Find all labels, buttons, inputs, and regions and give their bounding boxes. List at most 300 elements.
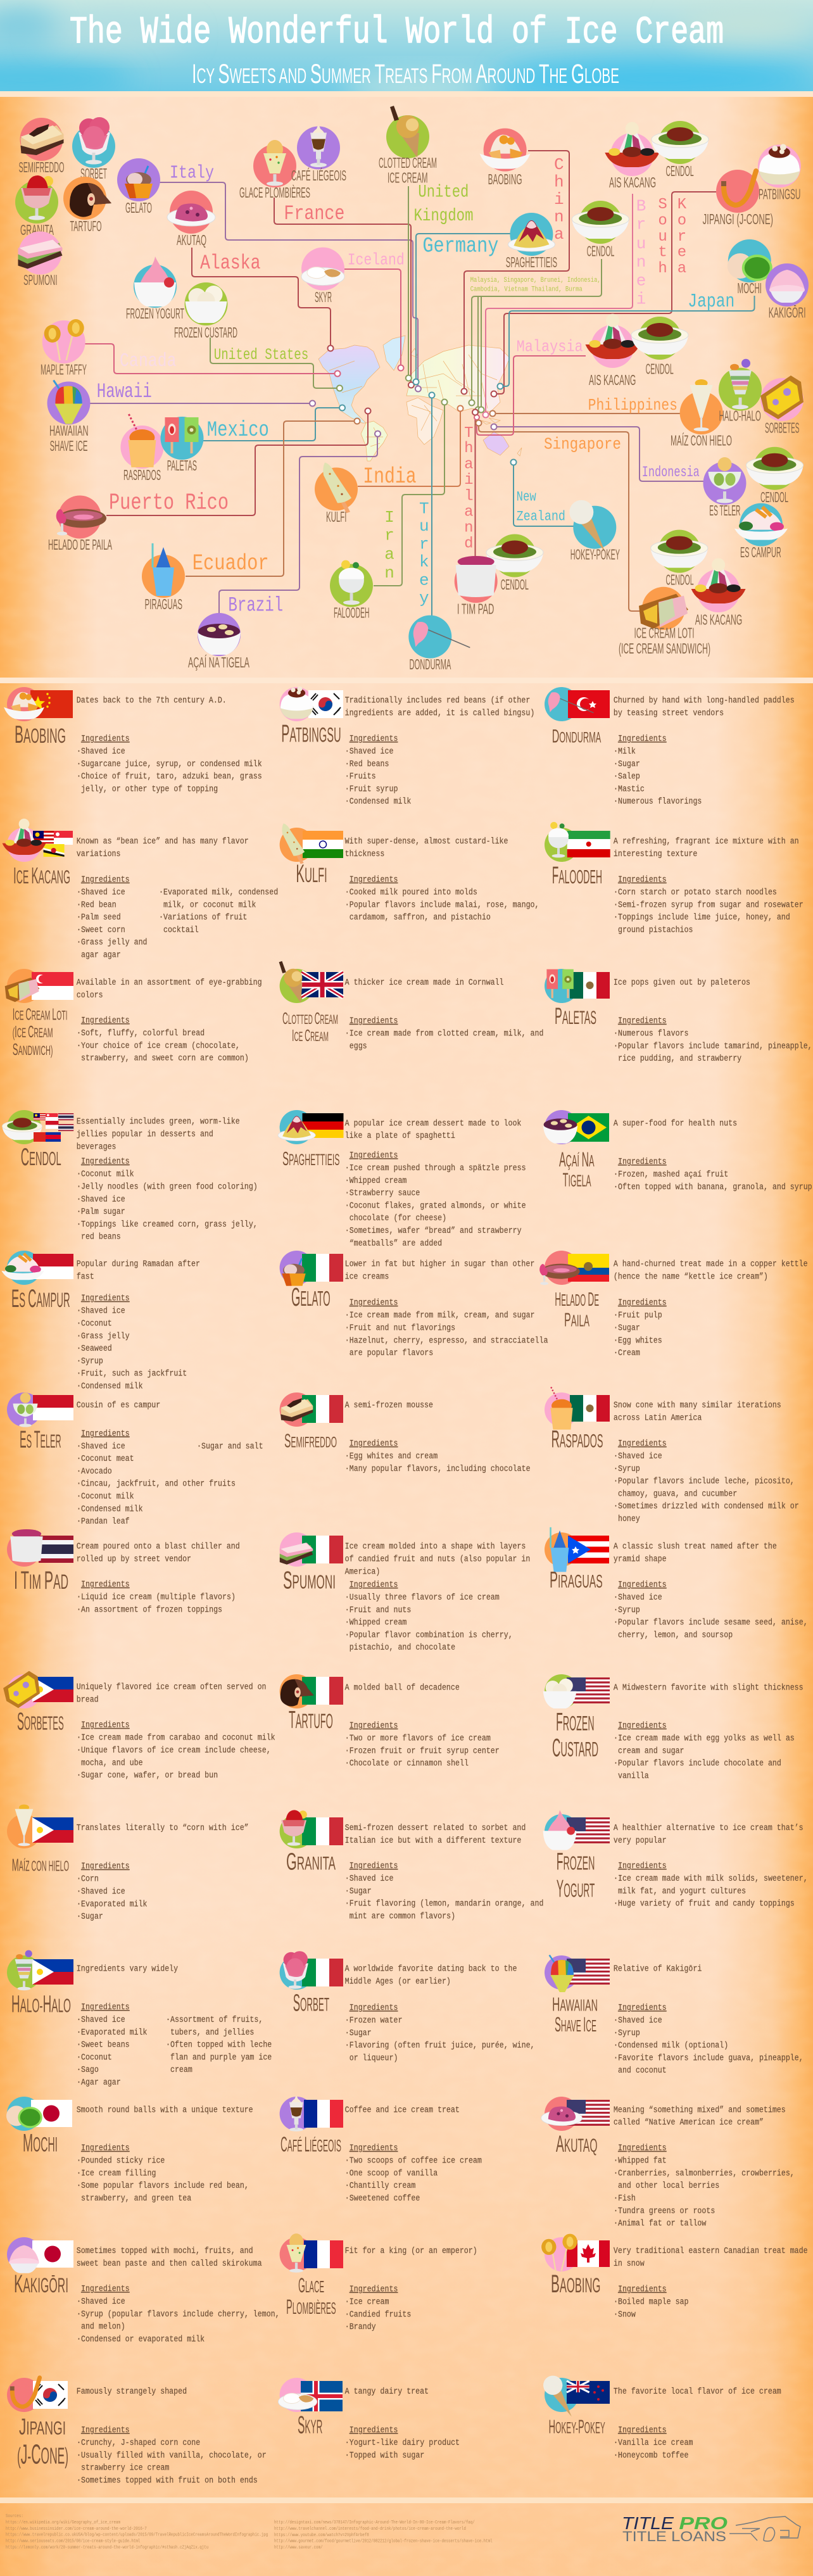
card: Sorbet: ·Frozen water — [345, 2015, 402, 2025]
map item: Granita: GRANITA — [20, 222, 54, 238]
card: Frozen Yogurt — [543, 1810, 808, 1909]
card: Helado de Paila: ·Egg whites — [614, 1335, 662, 1346]
card: Akutaq: and other local berries — [618, 2180, 719, 2191]
card: Sorbetes: bread — [77, 1694, 99, 1705]
map item: Es Teler: ES TELER — [709, 502, 740, 519]
card: Sorbet: Middle Ages (or earlier) — [345, 1976, 451, 1986]
card: Spumoni — [280, 1532, 530, 1653]
card: Paletas — [545, 969, 812, 1064]
card: Ice Cream Loti: ·Your choice of ice cream (chocolate, — [77, 1040, 240, 1051]
card: Patbingsu: ·Red beans — [345, 759, 389, 769]
card: Halo-Halo: flan and purple yam ice — [170, 2052, 272, 2062]
map item: Halo-Halo: HALO-HALO — [719, 408, 761, 424]
card: Raspados: ·Shaved ice — [614, 1451, 662, 1461]
card: I Tim Pad: Ingredients — [81, 1579, 130, 1589]
card: Hawaiian Shave Ice: SHAVE ICE — [555, 2013, 596, 2036]
card: Frozen Custard: ·Ice cream made with egg yolks as well as — [614, 1733, 795, 1743]
card: Semifreddo: ·Egg whites and cream — [345, 1451, 438, 1461]
country labels: Thailand — [464, 425, 474, 553]
card: Es Campur: Ingredients — [81, 1293, 130, 1303]
country labels: Singapore — [544, 435, 621, 454]
card: Semifreddo: ·Many popular flavors, including chocolate — [345, 1463, 531, 1474]
card: Hokey-Pokey: Ingredients — [618, 2425, 667, 2435]
map item: Dondurma — [408, 616, 470, 672]
card: I Tim Pad: Cream poured onto a blast chiller and — [77, 1541, 240, 1551]
card: Helado de Paila: HELADO DE — [555, 1288, 599, 1310]
card: Spaghettieis: like a plate of spaghetti — [345, 1130, 455, 1140]
card: Jipangi: ·Sometimes topped with fruit on both ends — [77, 2475, 258, 2485]
map item: Hokey-Pokey — [569, 500, 620, 563]
card: Hawaiian Shave Ice: ·Favorite flavors include guava, pineapple, — [614, 2052, 804, 2063]
card: Halo-Halo: ·Often topped with leche — [166, 2040, 272, 2050]
card: Es Teler: ·Coconut meat — [77, 1453, 134, 1463]
map item: Es Campur — [734, 503, 788, 560]
card: Maiz con Hielo: ·Evaporated milk — [77, 1898, 148, 1909]
card: Skyr: A tangy dairy treat — [345, 2386, 429, 2396]
card: Acai na Tigela: AÇAÍ NA — [559, 1148, 595, 1171]
country labels: Ecuador — [192, 551, 269, 576]
map item: Cendol (Brunei) — [652, 121, 709, 179]
card: Faloodeh: ground pistachios — [618, 925, 693, 935]
card: Frozen Custard: A Midwestern favorite with slight thickness — [614, 1683, 804, 1693]
card: Baobing: ·Shaved ice — [77, 746, 125, 756]
card: Baobing (maple taffy): Very traditional eastern Canadian treat made — [614, 2245, 808, 2256]
card: Frozen Custard: cream and sugar — [618, 1745, 684, 1756]
map item: Hawaiian Shave Ice: SHAVE ICE — [50, 438, 87, 454]
card: Hokey-Pokey: HOKEY-POKEY — [548, 2415, 605, 2438]
card: Clotted Cream Ice Cream: ICE CREAM — [292, 1026, 329, 1045]
card: Spumoni: SPUMONI — [283, 1567, 336, 1594]
map item: Cendol (Southeast Asia) — [572, 201, 629, 260]
card: Ice Cream Loti: ICE CREAM LOTI — [13, 1004, 68, 1023]
card: Patbingsu: Ingredients — [350, 733, 398, 743]
card: Es Campur: Popular during Ramadan after — [77, 1259, 200, 1269]
map item: Baobing — [480, 129, 531, 187]
country labels: New — [517, 489, 536, 505]
country labels: Mexico — [207, 419, 269, 443]
card: Raspados: honey — [618, 1513, 640, 1524]
card: Cendol: ·Shaved ice — [77, 1194, 125, 1204]
card: Frozen Yogurt: A healthier alternative to ice cream that’s — [614, 1822, 804, 1833]
card: Mochi: MOCHI — [23, 2130, 58, 2157]
map item: Ice Cream Loti — [619, 587, 710, 657]
card: Baobing: ·Choice of fruit, taro, adzuki bean, grass — [77, 771, 262, 781]
card: Cendol: ·Jelly noodles (with green food coloring) — [77, 1182, 258, 1192]
card: Spaghettieis: Ingredients — [350, 1150, 398, 1160]
card: Gelato: GELATO — [291, 1282, 331, 1311]
card: Spumoni: pistachio, and chocolate — [350, 1642, 455, 1653]
card: Es Campur: ·Seaweed — [77, 1343, 112, 1353]
map item: Mochi: MOCHI — [737, 280, 762, 296]
card: Ice Kacang: milk, or coconut milk — [163, 899, 256, 910]
country labels: Puerto Rico — [109, 489, 229, 515]
card: Sorbetes: Uniquely flavored ice cream often served on — [77, 1682, 267, 1692]
map item: Skyr: SKYR — [315, 289, 332, 305]
text: MAPLE TAFFY — [41, 362, 87, 378]
card: Acai na Tigela — [543, 1110, 812, 1192]
card: Spumoni: ·Whipped cream — [345, 1617, 407, 1627]
card: Semifreddo: Ingredients — [350, 1438, 398, 1448]
map item: Cendol (Singapore) — [651, 530, 708, 588]
card: Frozen Yogurt: ·Ice cream made with milk solids, sweetener, — [614, 1873, 808, 1883]
card: Clotted Cream Ice Cream: eggs — [350, 1040, 367, 1051]
card: Clotted Cream Ice Cream: CLOTTED CREAM — [282, 1009, 338, 1028]
card: Cafe Liegeois: ·Sweetened coffee — [345, 2193, 420, 2203]
card: Halo-Halo: tubers, and jellies — [170, 2027, 254, 2037]
card: Faloodeh: ·Corn starch or potato starch noodles — [614, 887, 777, 897]
card: Baobing (maple taffy): Ingredients — [618, 2284, 667, 2294]
card: Dondurma — [545, 687, 795, 807]
card: Maiz con Hielo: MAÍZ CON HIELO — [12, 1855, 69, 1874]
card: Sorbetes: mocha, and ube — [81, 1757, 143, 1768]
card: Spumoni: ·Fruit and nuts — [345, 1605, 411, 1615]
card: Acai na Tigela: A super-food for health nuts — [614, 1118, 737, 1128]
card: Glace Plombieres — [280, 2233, 477, 2332]
card: Glace Plombieres: PLOMBIÈRES — [286, 2295, 336, 2318]
card: Piraguas: cherry, lemon, and soursop — [618, 1629, 733, 1640]
card: Baobing: ·Sugarcane juice, syrup, or condensed milk — [77, 759, 262, 769]
card: Piraguas: ·Syrup — [614, 1605, 640, 1615]
card: Spaghettieis — [278, 1110, 526, 1248]
card: Helado de Paila: (hence the name “kettle ice cream”) — [614, 1271, 768, 1282]
map item: Sorbet — [72, 117, 115, 182]
card: Clotted Cream Ice Cream — [279, 961, 543, 1051]
card: Faloodeh: interesting texture — [614, 849, 697, 859]
card: Faloodeh: ·Semi-frozen syrup from sugar and rosewater — [614, 899, 804, 910]
card: Frozen Custard: CUSTARD — [552, 1734, 598, 1762]
map item: Cendol (Thailand) — [486, 534, 543, 593]
connector lines — [85, 151, 755, 616]
card: I Tim Pad — [7, 1529, 240, 1615]
card: Gelato: ·Hazelnut, cherry, espresso, and stracciatella — [345, 1335, 548, 1346]
card: Halo-Halo: ·Coconut — [77, 2052, 112, 2062]
card: Jipangi: (J-CONE) — [17, 2439, 68, 2470]
card: Paletas: PALETAS — [555, 1003, 596, 1029]
country labels: Philippines — [588, 396, 678, 415]
card: Hawaiian Shave Ice: Ingredients — [618, 2002, 667, 2012]
card: Frozen Yogurt: milk fat, and yogurt cultures — [618, 1886, 746, 1896]
card: Piraguas: Ingredients — [618, 1579, 667, 1589]
card: Mochi — [6, 2097, 253, 2203]
card: Kakigori: Sometimes topped with mochi, fruits, and — [77, 2245, 253, 2256]
card: Baobing (maple taffy): ·Snow — [614, 2309, 636, 2320]
card: Ice Cream Loti: Ingredients — [81, 1015, 130, 1025]
map item: Raspados: RASPADOS — [123, 467, 161, 483]
card: Tartufo: ·Chocolate or cinnamon shell — [345, 1758, 469, 1768]
card: Spaghettieis: ·Coconut flakes, grated almonds, or white — [345, 1200, 526, 1211]
card: Tartufo: A molded ball of decadence — [345, 1683, 460, 1693]
logo: Title Pro Title Loans: PRO — [679, 2513, 728, 2533]
country labels: Canada — [120, 350, 176, 372]
map item: Faloodeh — [330, 560, 373, 621]
card: Cafe Liegeois: ·One scoop of vanilla — [345, 2168, 438, 2178]
map item: Ais Kacang (Malaysia): AIS KACANG — [589, 372, 636, 388]
text: CAFÉ LIÉGEOIS — [291, 167, 346, 184]
card: Cendol: CENDOL — [21, 1144, 61, 1171]
map item: Cendol (Southeast Asia): CENDOL — [587, 243, 614, 260]
card: Spumoni: ·Usually three flavors of ice cream — [345, 1592, 500, 1602]
text: FROZEN YOGURT — [126, 305, 184, 322]
card: Ice Kacang: Ingredients — [81, 874, 130, 885]
card: Maiz con Hielo: Ingredients — [81, 1861, 130, 1871]
card: Es Teler: ES TELER — [20, 1427, 61, 1453]
country labels: Kingdom — [414, 206, 474, 226]
map item: Helado de Paila — [48, 495, 112, 553]
card: Piraguas: yramid shape — [614, 1554, 667, 1564]
card: Es Campur: ·Fruit, such as jackfruit — [77, 1368, 187, 1379]
card: Glace Plombieres: Ingredients — [350, 2284, 398, 2294]
country labels: Japan — [688, 291, 734, 313]
text: FALOODEH — [334, 605, 370, 621]
card: Ice Kacang: ·Variations of fruit — [159, 912, 247, 922]
map item: Raspados — [120, 414, 163, 483]
country labels: South — [658, 196, 667, 277]
card: Raspados: across Latin America — [614, 1412, 702, 1423]
country labels: France — [284, 202, 344, 225]
sources: left column: http://www.seriouseats.com/2015/08/ice-cream-style-guide.html — [6, 2539, 140, 2544]
card: Jipangi: ·Crunchy, J-shaped corn cone — [77, 2437, 200, 2447]
world map — [318, 336, 522, 461]
card: Halo-Halo: ·Evaporated milk — [77, 2027, 148, 2037]
card: Piraguas: A classic slush treat named after the — [614, 1541, 777, 1551]
country labels: China — [554, 155, 564, 244]
card: Glace Plombieres: Fit for a king (or an emperor) — [345, 2245, 477, 2256]
country labels: Iran — [384, 508, 394, 583]
card: Semifreddo — [280, 1392, 531, 1474]
card: Sorbetes: ·Sugar cone, wafer, or bread bun — [77, 1770, 218, 1780]
map item: Gelato — [117, 158, 160, 216]
card: Jipangi: Famously strangely shaped — [77, 2386, 187, 2396]
sources: left column: http://www.businessinsider.com/ice-cream-around-the-world-2016-7 — [6, 2526, 147, 2531]
card: Faloodeh — [545, 822, 804, 935]
card: Akutaq: Meaning “something mixed” and sometimes — [614, 2104, 786, 2115]
map item: Ais Kacang (Brunei) — [605, 122, 659, 191]
sources: right column: https://www.youtube.com/watch?v=2VphfArbef8 — [274, 2532, 369, 2537]
card: Dondurma: ·Sugar — [614, 759, 640, 769]
card: Ice Cream Loti: strawberry, and sweet corn are common) — [81, 1053, 249, 1063]
card: Baobing — [4, 687, 262, 794]
card: Frozen Custard: vanilla — [618, 1771, 649, 1781]
card: Kakigori: ·Shaved ice — [77, 2296, 125, 2306]
card: Raspados: Snow cone with many similar iterations — [614, 1400, 781, 1410]
card: Sorbetes: ·Unique flavors of ice cream include cheese, — [77, 1745, 271, 1755]
card: Sorbetes: SORBETES — [17, 1708, 64, 1735]
card: Sorbet: SORBET — [293, 1990, 329, 2016]
text: CLOTTED CREAM — [379, 155, 437, 171]
card: Granita: ·Sugar — [345, 1886, 372, 1896]
card: Gelato: Ingredients — [350, 1297, 398, 1308]
card: Mochi: ·Some popular flavors include red bean, — [77, 2180, 249, 2191]
card: Frozen Custard: Ingredients — [618, 1720, 667, 1731]
card: Baobing (maple taffy) — [541, 2234, 808, 2320]
card: Kulfi: cardamom, saffron, and pistachio — [350, 912, 491, 922]
card: Es Teler: ·Avocado — [77, 1466, 112, 1476]
country labels: Malaysia — [517, 337, 583, 356]
map item: Maiz con Hielo: MAÍZ CON HIELO — [671, 432, 732, 449]
card: Glace Plombieres: ·Brandy — [345, 2321, 376, 2332]
card: Sorbet — [280, 1951, 535, 2063]
map item: Cendol (Indonesia) — [746, 447, 803, 505]
card: Patbingsu — [280, 686, 534, 807]
card: Es Teler: Cousin of es campur — [77, 1400, 160, 1410]
card: Sorbetes: Ingredients — [81, 1720, 130, 1730]
map item: Patbingsu — [758, 144, 801, 202]
map item: Sorbetes — [760, 376, 804, 436]
map item: Jipangi — [703, 170, 773, 227]
card: Cendol — [3, 1110, 258, 1242]
card: Spumoni: of candied fruit and nuts (also popular in — [345, 1554, 530, 1564]
card: Baobing: Dates back to the 7th century A.D. — [77, 695, 227, 705]
card: Es Campur — [1, 1251, 200, 1391]
card: Ice Cream Loti — [5, 969, 262, 1063]
map item: Acai na Tigela: AÇAÍ NA TIGELA — [188, 654, 249, 671]
card: Ice Kacang: ·Grass jelly and — [77, 937, 148, 947]
country labels: United States — [214, 346, 308, 364]
card: Akutaq — [541, 2097, 795, 2228]
card: Halo-Halo: ·Shaved ice — [77, 2014, 125, 2024]
card: Spaghettieis: chocolate (for cheese) — [350, 1213, 446, 1223]
card: Cafe Liegeois: ·Chantilly cream — [345, 2180, 416, 2191]
card: Sorbet: A worldwide favorite dating back to the — [345, 1964, 517, 1974]
card: Jipangi: Ingredients — [81, 2425, 130, 2435]
card: Ice Kacang: ICE KACANG — [13, 862, 70, 888]
map item: Tartufo — [63, 177, 111, 234]
card: Ice Kacang: cocktail — [163, 925, 199, 935]
card: Spaghettieis: ·Strawberry sauce — [345, 1188, 420, 1198]
map item: Ice Cream Loti: (ICE CREAM SANDWICH) — [619, 640, 710, 657]
map item: Ais Kacang (Malaysia) — [585, 314, 640, 388]
card: Baobing (maple taffy): BAOBING — [551, 2270, 600, 2298]
card: Patbingsu: ·Fruit syrup — [345, 783, 398, 794]
card: Frozen Yogurt: Ingredients — [618, 1860, 667, 1871]
card: Gelato — [280, 1251, 548, 1358]
country labels: Korea — [678, 196, 687, 277]
country labels: India — [363, 464, 417, 489]
card: Kakigori: sweet bean paste and then called skirokuma — [77, 2258, 262, 2268]
card: Es Campur: ·Shaved ice — [77, 1306, 125, 1316]
map item: Maple Taffy — [41, 319, 87, 378]
country labels: Malaysia, Singapore, Brunei, Indonesia, — [470, 277, 601, 284]
country labels: United — [418, 183, 469, 203]
country labels: Alaska — [200, 251, 261, 275]
card: Mochi: Ingredients — [81, 2143, 130, 2153]
logo: Title Pro Title Loans: TITLE — [622, 2513, 674, 2533]
card: Ice Kacang: Known as “bean ice” and has many flavor — [77, 836, 249, 846]
card: Paletas: ·Numerous flavors — [614, 1028, 688, 1039]
card: Kakigori — [7, 2237, 280, 2344]
map item: Clotted Cream Ice Cream: ICE CREAM — [388, 170, 428, 186]
card: Granita: Semi-frozen dessert related to sorbet and — [345, 1822, 526, 1833]
map item: Cendol (Malaysia) — [631, 317, 688, 377]
map item: Sorbet: SORBET — [80, 165, 107, 182]
card: Raspados: chamoy, guava, and cucumber — [618, 1488, 737, 1499]
card: Hawaiian Shave Ice: and coconut — [618, 2065, 667, 2076]
map item: Cendol (Singapore): CENDOL — [666, 571, 694, 588]
card: Faloodeh: FALOODEH — [552, 862, 602, 889]
card: Kulfi: With super-dense, almost custard-like — [345, 836, 508, 846]
card: Cendol: ·Coconut milk — [77, 1169, 134, 1179]
map item: Frozen Custard — [174, 282, 237, 341]
card: Halo-Halo: ·Agar agar — [77, 2077, 121, 2087]
card: Kulfi: ·Popular flavors include malai, rose, mango, — [345, 899, 539, 910]
map item: Kakigori — [766, 263, 809, 321]
card: Raspados: ·Popular flavors include leche, picosito, — [614, 1476, 795, 1486]
card: Ice Cream Loti: ·Soft, fluffy, colorful bread — [77, 1028, 205, 1038]
card: Gelato: ·Fruit and nut flavorings — [345, 1323, 455, 1333]
card: Glace Plombieres: ·Ice cream — [345, 2297, 389, 2307]
card: Mochi: strawberry, and green tea — [81, 2193, 191, 2203]
card: Ice Cream Loti: SANDWICH) — [13, 1040, 53, 1059]
card: I Tim Pad: ·An assortment of frozen toppings — [77, 1604, 222, 1615]
map item: Ais Kacang (Singapore): AIS KACANG — [695, 612, 742, 628]
card: Kakigori: ·Condensed or evaporated milk — [77, 2333, 205, 2344]
card: Baobing: Ingredients — [81, 733, 130, 743]
card: Akutaq: called “Native American ice cream” — [614, 2117, 764, 2127]
card: Dondurma: by teasing street vendors — [614, 707, 724, 718]
card: I Tim Pad: rolled up by street vendor — [77, 1554, 191, 1564]
card: Dondurma: Ingredients — [618, 733, 667, 743]
map item: Es Teler — [703, 457, 746, 519]
map item: Mochi — [728, 239, 772, 296]
card: Cendol: Essentially includes green, worm-like — [77, 1116, 240, 1127]
card: Granita: ·Shaved ice — [345, 1873, 393, 1883]
card: Kakigori: and melon) — [81, 2321, 125, 2332]
card: Kakigori: Ingredients — [81, 2283, 130, 2294]
card: Helado de Paila — [539, 1251, 808, 1358]
card: Hawaiian Shave Ice — [545, 1955, 804, 2076]
card: Gelato: are popular flavors — [350, 1348, 433, 1358]
country labels: Hawaii — [97, 380, 152, 403]
card: Semifreddo: SEMIFREDDO — [284, 1429, 337, 1451]
card: Halo-Halo: Ingredients — [81, 2002, 130, 2012]
card: Sorbet: ·Sugar — [345, 2028, 372, 2038]
card: Ice Kacang: ·Palm seed — [77, 912, 121, 922]
text: HOKEY-POKEY — [570, 546, 620, 563]
country labels: Iceland — [348, 251, 405, 270]
card: I Tim Pad: I TIM PAD — [14, 1567, 68, 1594]
card: Sorbetes: ·Ice cream made from carabao and coconut milk — [77, 1733, 275, 1743]
card: Maiz con Hielo: ·Sugar — [77, 1911, 103, 1921]
card: Raspados: RASPADOS — [551, 1426, 603, 1453]
card: Akutaq: AKUTAQ — [556, 2131, 598, 2157]
card: Maiz con Hielo — [7, 1805, 249, 1921]
card: Dondurma: Churned by hand with long-handled paddles — [614, 695, 795, 705]
card: Es Teler: Ingredients — [81, 1428, 130, 1439]
card: Cendol: ·Palm sugar — [77, 1206, 125, 1216]
map item: Cendol (Malaysia): CENDOL — [646, 361, 674, 377]
sources: right column: http://www.gourmet.com/food/gourmetlive/2012/082212/global-frozen-shave-ice-desserts/shave-ice.html — [274, 2539, 493, 2544]
map item: Tartufo: TARTUFO — [70, 218, 101, 234]
card: Faloodeh: A refreshing, fragrant ice mixture with an — [614, 836, 799, 846]
map item: Spaghettieis — [506, 213, 557, 270]
card: Sorbetes — [3, 1671, 275, 1780]
text: FROZEN CUSTARD — [174, 324, 237, 341]
card: Acai na Tigela: Ingredients — [618, 1156, 667, 1166]
card: Spumoni: Ice cream molded into a shape with layers — [345, 1541, 526, 1551]
card: Sorbet: or liqueur) — [350, 2052, 398, 2063]
card: Cendol: red beans — [81, 1232, 121, 1242]
map item: Maiz con Hielo — [671, 379, 732, 449]
card: Mochi: Smooth round balls with a unique texture — [77, 2104, 253, 2115]
card: Raspados: ·Syrup — [614, 1463, 640, 1474]
card: Cafe Liegeois: ·Two scoops of coffee ice cream — [345, 2156, 482, 2166]
card: Ice Kacang: ·Red bean — [77, 899, 117, 910]
map item: Acai na Tigela — [188, 613, 249, 671]
country labels: Cambodia, Vietnam Thailand, Burma — [470, 286, 583, 294]
map item: Piraguas: PIRAGUAS — [144, 596, 182, 612]
card: Frozen Custard — [543, 1674, 804, 1781]
card: Hawaiian Shave Ice: ·Syrup — [614, 2028, 640, 2038]
